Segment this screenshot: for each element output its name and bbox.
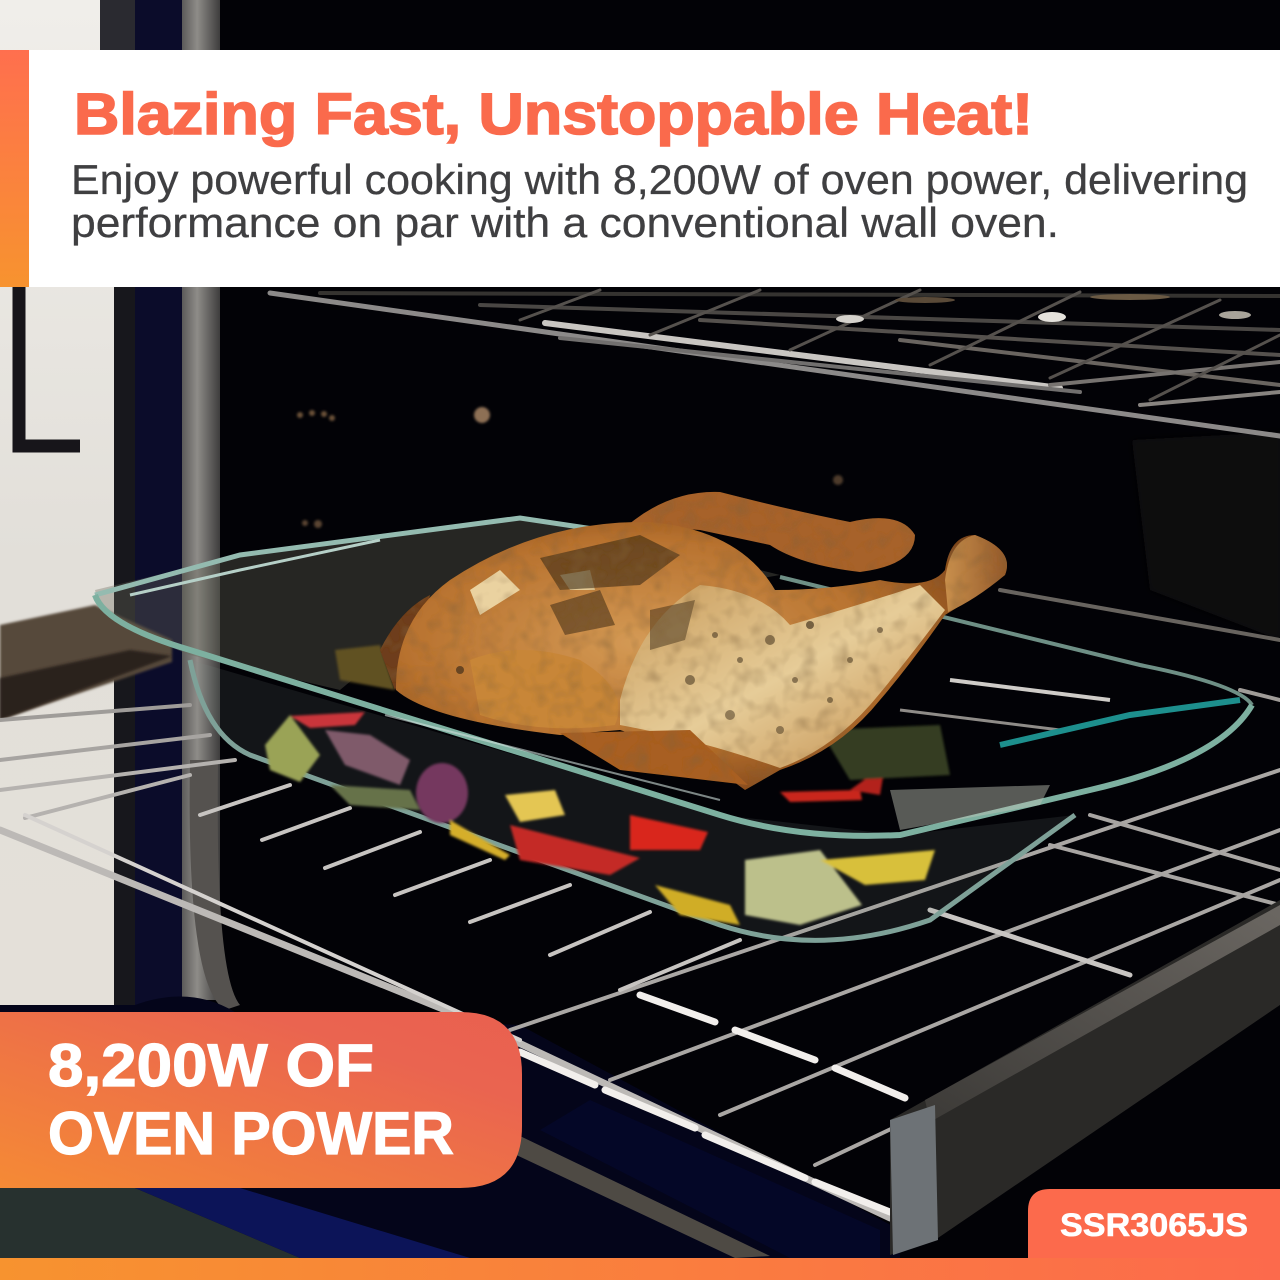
- bottom gradient bar: [0, 1258, 1280, 1280]
- front rack rail: [890, 900, 1280, 1255]
- accent stripe: [0, 50, 29, 287]
- upper oven rack: [270, 290, 1280, 436]
- description: [71, 156, 1248, 246]
- roast chicken: [380, 492, 1007, 790]
- icon: oven door handle: [19, 287, 80, 446]
- header banner: [0, 50, 1280, 287]
- description: Enjoy powerful cooking with 8,200W of oven power, delivering: [71, 156, 1248, 203]
- title: Blazing Fast, Unstoppable Heat!: [74, 82, 1033, 147]
- lower oven rack: [0, 590, 1280, 1218]
- vegetables: [265, 645, 950, 925]
- callout: 8,200W of oven power: 8,200W OF: [48, 1032, 374, 1099]
- glass baking dish: [95, 518, 1252, 940]
- callout: 8,200W of oven power: [0, 1012, 522, 1188]
- callout: 8,200W of oven power: OVEN POWER: [48, 1100, 454, 1167]
- glass dish front rim: [95, 595, 1252, 836]
- description: performance on par with a conventional wall oven.: [71, 199, 1059, 246]
- model number tag: SSR3065JS: [1060, 1207, 1248, 1243]
- model number tag: [1028, 1189, 1280, 1258]
